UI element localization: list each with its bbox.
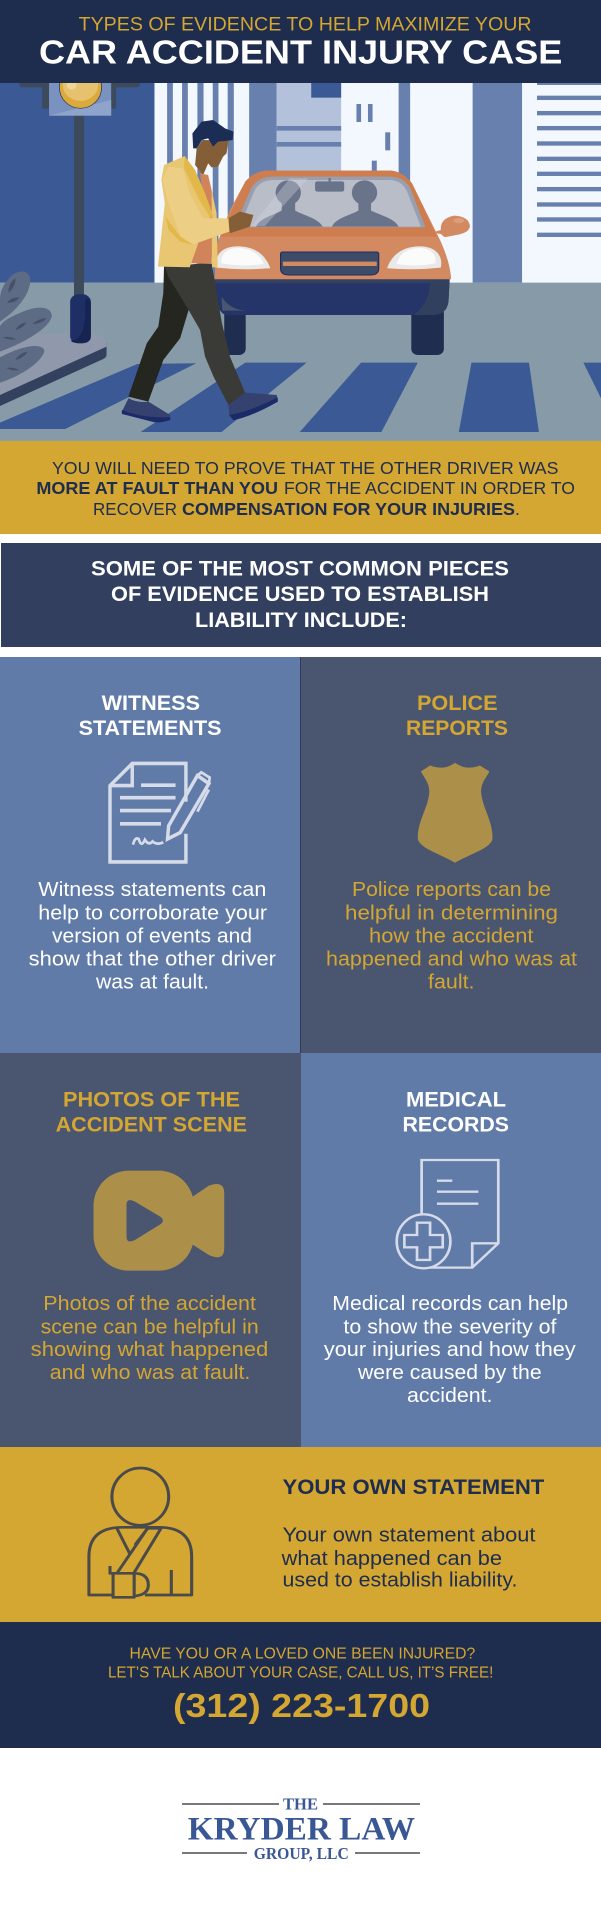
police body text: how the accident bbox=[369, 925, 534, 947]
section heading text bbox=[91, 557, 509, 632]
intro text: YOU WILL NEED TO PROVE THAT THE OTHER DRIVER WAS bbox=[52, 458, 558, 478]
logo: The Kryder Law Group: GROUP, LLC bbox=[254, 1844, 349, 1863]
icon: video camera bbox=[94, 1171, 224, 1271]
photos heading: ACCIDENT SCENE bbox=[56, 1114, 247, 1137]
medical body text: were caused by the bbox=[357, 1362, 542, 1384]
section heading box bbox=[1, 543, 601, 647]
panel: police reports bbox=[300, 657, 601, 1053]
call to action text: LET’S TALK ABOUT YOUR CASE, CALL US, IT’S FREE! bbox=[108, 1664, 493, 1681]
panel: photos of the accident scene bbox=[0, 1053, 301, 1447]
grille bbox=[281, 252, 379, 275]
medical heading: MEDICAL bbox=[406, 1089, 506, 1112]
call to action panel bbox=[0, 1622, 601, 1748]
medical heading: RECORDS bbox=[402, 1114, 509, 1137]
panel: your own statement bbox=[0, 1447, 601, 1622]
photos body text: scene can be helpful in bbox=[41, 1316, 259, 1338]
icon: signed document with pen bbox=[110, 763, 210, 862]
icon: police badge bbox=[418, 763, 493, 863]
traffic light bbox=[19, 66, 140, 343]
intro text: RECOVER bbox=[93, 499, 177, 519]
police body text: helpful in determining bbox=[345, 902, 558, 924]
intro text: FOR THE ACCIDENT IN ORDER TO bbox=[284, 478, 575, 498]
police heading: POLICE bbox=[417, 692, 498, 715]
witness body text: version of events and bbox=[52, 925, 252, 947]
police heading bbox=[406, 692, 508, 740]
witness body text: show that the other driver bbox=[29, 949, 276, 971]
police body text: fault. bbox=[428, 972, 474, 994]
icon: person with arm sling bbox=[89, 1468, 192, 1597]
plant leaves bbox=[0, 272, 52, 383]
witness body text bbox=[29, 879, 276, 994]
intro text: MORE AT FAULT THAN YOU bbox=[36, 478, 278, 498]
witness body text: help to corroborate your bbox=[38, 902, 267, 924]
logo: The Kryder Law Group: KRYDER LAW bbox=[188, 1811, 415, 1847]
illustration: man walking past car at crosswalk bbox=[0, 66, 601, 441]
call to action text bbox=[108, 1645, 493, 1681]
witness heading: STATEMENTS bbox=[79, 717, 221, 740]
panel: witness statements bbox=[0, 657, 300, 1053]
photos body text: Photos of the accident bbox=[43, 1293, 256, 1315]
statement heading: YOUR OWN STATEMENT bbox=[282, 1476, 544, 1499]
intro text bbox=[36, 458, 575, 519]
call to action text: HAVE YOU OR A LOVED ONE BEEN INJURED? bbox=[130, 1645, 475, 1662]
photos body text: and who was at fault. bbox=[50, 1362, 250, 1384]
intro text: COMPENSATION FOR YOUR INJURIES bbox=[182, 499, 515, 519]
medical heading bbox=[402, 1089, 509, 1137]
statement body text: Your own statement about bbox=[282, 1525, 536, 1547]
logo: The Kryder Law Group bbox=[182, 1794, 420, 1863]
phone number: (312) 223-1700 bbox=[173, 1687, 430, 1724]
medical body text: Medical records can help bbox=[332, 1293, 568, 1315]
car bbox=[215, 171, 470, 355]
statement body text: what happened can be bbox=[281, 1548, 502, 1570]
panel: medical records bbox=[301, 1053, 601, 1447]
police body text bbox=[326, 879, 577, 994]
headlights bbox=[216, 246, 270, 269]
witness body text: Witness statements can bbox=[38, 879, 266, 901]
man bbox=[122, 120, 278, 422]
medical body text: to show the severity of bbox=[343, 1316, 557, 1338]
mirror bbox=[435, 216, 470, 237]
medical body text bbox=[324, 1293, 576, 1407]
medical body text: your injuries and how they bbox=[324, 1339, 576, 1361]
photos body text: showing what happened bbox=[31, 1339, 268, 1361]
sidewalk corner bbox=[0, 332, 107, 406]
witness heading: WITNESS bbox=[102, 692, 200, 715]
statement body text bbox=[281, 1525, 536, 1592]
photos heading: PHOTOS OF THE bbox=[63, 1089, 240, 1112]
witness heading bbox=[79, 692, 221, 740]
intro text: . bbox=[515, 499, 520, 519]
passengers bbox=[256, 180, 399, 227]
crosswalk stripes bbox=[0, 363, 601, 432]
witness body text: was at fault. bbox=[95, 972, 209, 994]
gold intro band bbox=[0, 441, 601, 534]
section heading text: SOME OF THE MOST COMMON PIECES bbox=[91, 557, 509, 580]
police body text: Police reports can be bbox=[352, 879, 551, 901]
title: first line: TYPES OF EVIDENCE TO HELP MAXIMIZE YOUR bbox=[79, 14, 532, 36]
police heading: REPORTS bbox=[406, 717, 508, 740]
statement body text: used to establish liability. bbox=[282, 1570, 517, 1592]
medical body text: accident. bbox=[407, 1385, 492, 1407]
icon: medical document with cross bbox=[397, 1160, 498, 1268]
photos heading bbox=[56, 1089, 247, 1137]
photos body text bbox=[31, 1293, 268, 1384]
section heading text: LIABILITY INCLUDE: bbox=[195, 609, 407, 632]
header panel bbox=[0, 0, 601, 83]
police body text: happened and who was at bbox=[326, 949, 577, 971]
title: second line: CAR ACCIDENT INJURY CASE bbox=[39, 34, 562, 71]
logo: The Kryder Law Group: THE bbox=[283, 1794, 318, 1814]
section heading text: OF EVIDENCE USED TO ESTABLISH bbox=[111, 583, 489, 606]
